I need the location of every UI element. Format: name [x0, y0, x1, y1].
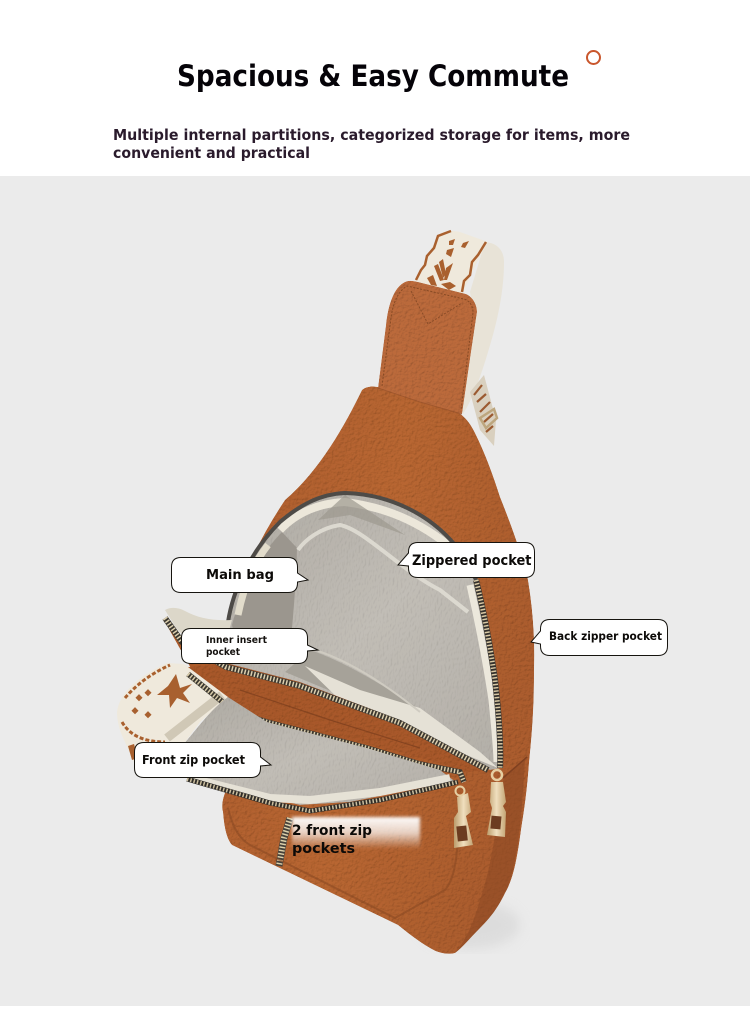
label text: 2 front zip pockets: 2 front zip [292, 823, 372, 839]
front pocket panel seam [228, 800, 460, 918]
strap: patterned front [415, 231, 488, 294]
subtitle: convenient and practical [113, 144, 310, 162]
side seam [503, 757, 527, 778]
bag main body [222, 386, 534, 954]
zipper pull: main compartment [487, 770, 506, 837]
ground shadow [420, 901, 520, 949]
callout: back zipper pocket [531, 620, 668, 656]
back edge shading [455, 760, 525, 953]
front pocket zipper [187, 779, 458, 811]
main zipper: dark arc [228, 493, 500, 768]
dark left interior [232, 532, 297, 655]
callout: back zipper pocket: Back zipper pocket [549, 629, 662, 643]
callout: main bag: Main bag [206, 567, 274, 583]
strap: back of loop [455, 242, 504, 414]
label text: 2 front zip pockets: pockets [292, 841, 355, 857]
subtitle [113, 126, 630, 162]
callout: front zip pocket [134, 742, 271, 778]
strap loop inside front pocket [117, 663, 228, 772]
front pocket lining [183, 697, 456, 805]
callout: zippered pocket: Zippered pocket [412, 553, 532, 569]
main compartment: lining [227, 493, 502, 770]
label text: 2 front zip pockets [292, 823, 372, 857]
callout: inner insert pocket [182, 628, 318, 664]
callout: inner insert pocket: Inner insert [206, 635, 267, 646]
strap: lower section and buckle [470, 375, 497, 446]
zippered pocket white trim [298, 525, 468, 612]
bag illustration [117, 231, 534, 954]
front flap leather band [165, 608, 498, 772]
callout: main bag [172, 558, 308, 592]
callout: inner insert pocket: pocket [206, 647, 240, 658]
title: Spacious & Easy Commute [177, 59, 569, 93]
label band: 2 front zip pockets [292, 817, 420, 857]
callout: zippered pocket [398, 542, 534, 578]
leather strap tab [378, 281, 477, 414]
flap zipper teeth [165, 618, 488, 782]
callout: front zip pocket: Front zip pocket [142, 753, 245, 767]
inner insert pocket [285, 650, 418, 708]
vertical front zipper [279, 818, 290, 866]
subtitle: Multiple internal partitions, categorized storage for items, more [113, 126, 630, 144]
zipper pull: front pocket [454, 786, 473, 848]
icon: orange ring [587, 51, 600, 64]
